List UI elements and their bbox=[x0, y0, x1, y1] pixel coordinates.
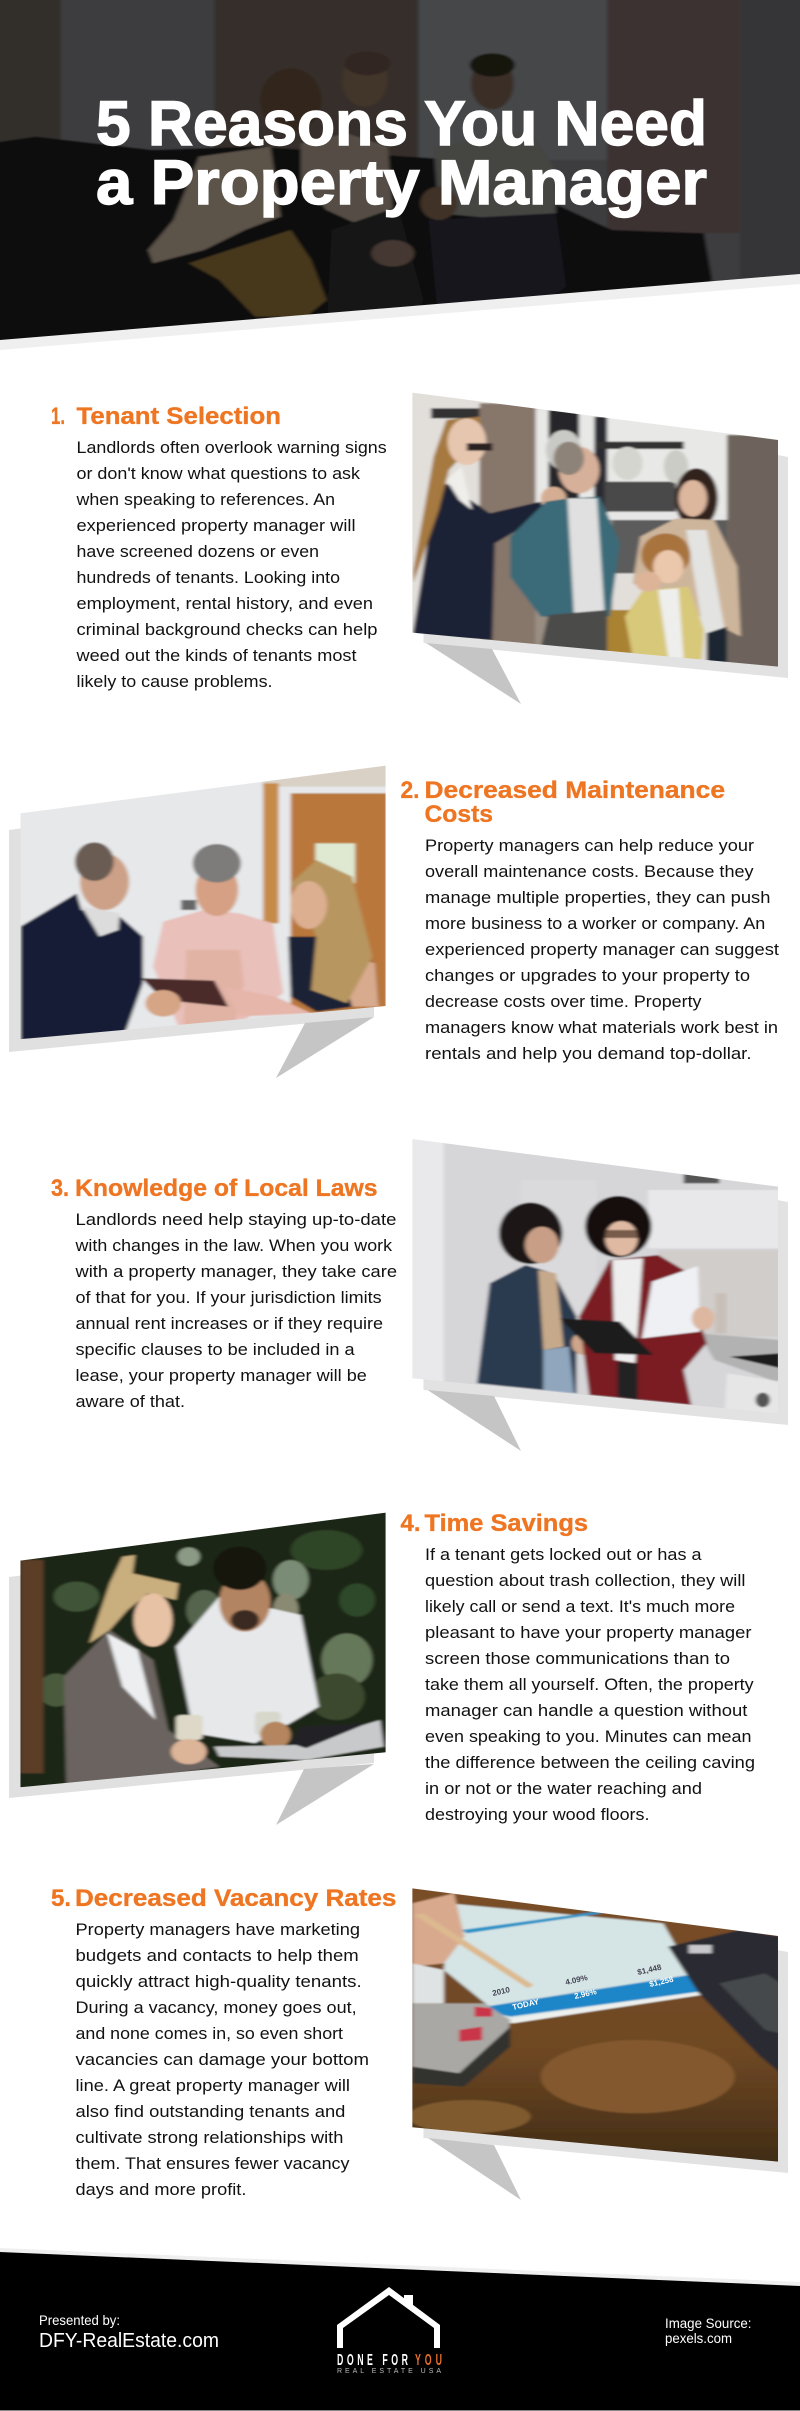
heading 2: Decreased Maintenance bbox=[424, 777, 725, 804]
text block 3: specific clauses to be included in a bbox=[76, 1341, 355, 1359]
text block 3: with changes in the law. When you work bbox=[74, 1237, 393, 1255]
text block 2: Property managers can help reduce your bbox=[425, 837, 755, 855]
text block 1: or don't know what questions to ask bbox=[76, 465, 361, 483]
text block 3: annual rent increases or if they require bbox=[76, 1315, 383, 1333]
text block 2: changes or upgrades to your property to bbox=[425, 967, 750, 985]
text block 2 bbox=[425, 837, 779, 1063]
hero banner bbox=[0, 0, 800, 360]
heading 5: Decreased Vacancy Rates bbox=[75, 1885, 396, 1912]
heading 1: Tenant Selection bbox=[76, 403, 281, 430]
text block 4: If a tenant gets locked out or has a bbox=[425, 1546, 702, 1564]
text block 1: Landlords often overlook warning signs bbox=[76, 439, 387, 457]
photo card 3 with shadow and speech tail bbox=[403, 1133, 791, 1451]
text block 4: take them all yourself. Often, the property bbox=[425, 1676, 754, 1694]
photo card 5 with shadow and speech tail bbox=[403, 1880, 791, 2200]
text block 4: in or not or the water reaching and bbox=[425, 1780, 702, 1798]
text block 1: hundreds of tenants. Looking into bbox=[76, 569, 340, 587]
text block 4: pleasant to have your property manager bbox=[425, 1624, 752, 1642]
title: a Property Manager bbox=[96, 148, 707, 218]
presented by: Presented by: bbox=[39, 2312, 120, 2328]
text block 4: question about trash collection, they will bbox=[425, 1572, 745, 1590]
text block 1: weed out the kinds of tenants most bbox=[75, 647, 357, 665]
text block 1: when speaking to references. An bbox=[75, 491, 335, 509]
text block 5: vacancies can damage your bottom bbox=[76, 2051, 369, 2069]
logo: done for you real estate usa bbox=[337, 2287, 442, 2375]
text block 5: cultivate strong relationships with bbox=[76, 2129, 343, 2147]
panel: reason 4 time savings bbox=[9, 1507, 755, 1825]
text block 5: and none comes in, so even short bbox=[76, 2025, 343, 2043]
report figures on the photo: $1,258 bbox=[648, 1975, 675, 1989]
image source: pexels.com bbox=[665, 2330, 732, 2346]
heading 2: Costs bbox=[424, 801, 493, 828]
photo: financial report, calculator and laptop on wood desk bbox=[412, 1888, 778, 2162]
photo: three colleagues around a tablet bbox=[10, 760, 393, 1047]
text block 2: decrease costs over time. Property bbox=[425, 993, 702, 1011]
report figures on the photo: $1,448 bbox=[636, 1963, 663, 1977]
text block 1: employment, rental history, and even bbox=[76, 595, 373, 613]
footer bbox=[0, 2248, 800, 2411]
text block 3: Landlords need help staying up-to-date bbox=[76, 1211, 396, 1229]
text block 1: experienced property manager will bbox=[76, 517, 356, 535]
report figures on the photo: 4.09% bbox=[564, 1973, 589, 1987]
text block 5: budgets and contacts to help them bbox=[76, 1947, 359, 1965]
text block 4: destroying your wood floors. bbox=[425, 1806, 650, 1824]
text block 4: even speaking to you. Minutes can mean bbox=[425, 1728, 752, 1746]
logo: done for you real estate usa: REAL ESTATE USA bbox=[337, 2368, 441, 2375]
hero photo: family with agent on a sofa bbox=[0, 0, 800, 360]
heading 5: 5. bbox=[51, 1885, 71, 1912]
text block 1: criminal background checks can help bbox=[76, 621, 378, 639]
text block 2: manage multiple properties, they can push bbox=[425, 889, 770, 907]
text block 4: screen those communications than to bbox=[425, 1650, 730, 1668]
text block 3: lease, your property manager will be bbox=[76, 1367, 367, 1385]
report figures on the photo bbox=[491, 1963, 675, 2012]
image source: Image Source: bbox=[665, 2315, 752, 2331]
report figures on the photo: 2.96% bbox=[573, 1987, 598, 2001]
text block 5: also find outstanding tenants and bbox=[76, 2103, 345, 2121]
logo: done for you real estate usa: DONE FOR bbox=[337, 2350, 408, 2369]
text block 3: of that for you. If your jurisdiction limits bbox=[76, 1289, 382, 1307]
text block 2: managers know what materials work best in bbox=[425, 1019, 778, 1037]
footer background bbox=[0, 2252, 800, 2411]
text block 5: them. That ensures fewer vacancy bbox=[76, 2155, 350, 2173]
text block 4: the difference between the ceiling caving bbox=[425, 1754, 755, 1772]
text block 3 bbox=[74, 1211, 397, 1411]
photo: businesswoman and man outdoors with folder bbox=[10, 1507, 393, 1793]
heading 3: Knowledge of Local Laws bbox=[75, 1175, 378, 1202]
logo: done for you real estate usa: YOU bbox=[415, 2350, 442, 2369]
heading 4: Time Savings bbox=[424, 1510, 588, 1537]
photo: two women reading documents in kitchen bbox=[412, 1139, 778, 1408]
heading 4: 4. bbox=[400, 1510, 420, 1537]
presented by: DFY-RealEstate.com bbox=[39, 2330, 219, 2352]
panel: reason 3 knowledge of local laws bbox=[51, 1133, 791, 1451]
heading 3: 3. bbox=[51, 1175, 69, 1202]
text block 2: rentals and help you demand top-dollar. bbox=[425, 1045, 752, 1063]
text block 2: more business to a worker or company. An bbox=[425, 915, 765, 933]
text block 1: have screened dozens or even bbox=[76, 543, 319, 561]
text block 2: overall maintenance costs. Because they bbox=[425, 863, 754, 881]
panel: reason 5 decreased vacancy rates bbox=[51, 1880, 791, 2200]
report figures on the photo: TODAY bbox=[511, 1997, 541, 2012]
photo card 1 with shadow and speech tail bbox=[403, 387, 791, 704]
text block 2: experienced property manager can suggest bbox=[425, 941, 779, 959]
text block 1: likely to cause problems. bbox=[76, 673, 272, 691]
text block 5: quickly attract high-quality tenants. bbox=[76, 1973, 362, 1991]
text block 5 bbox=[76, 1921, 369, 2199]
heading 1: 1. bbox=[51, 403, 65, 430]
panel: reason 1 tenant selection bbox=[51, 387, 791, 704]
footer shadow band bbox=[0, 2248, 800, 2288]
text block 4: manager can handle a question without bbox=[425, 1702, 748, 1720]
text block 4: likely call or send a text. It's much more bbox=[425, 1598, 735, 1616]
photo card 4 with shadow and speech tail bbox=[9, 1507, 393, 1825]
text block 5: During a vacancy, money goes out, bbox=[76, 1999, 357, 2017]
report figures on the photo: 2010 bbox=[491, 1985, 511, 1998]
text block 5: line. A great property manager will bbox=[76, 2077, 350, 2095]
heading 2 bbox=[400, 777, 725, 828]
text block 5: days and more profit. bbox=[76, 2181, 246, 2199]
text block 3: with a property manager, they take care bbox=[74, 1263, 397, 1281]
hero shadow band bbox=[0, 274, 800, 350]
presented by bbox=[39, 2312, 219, 2352]
photo card 2 with shadow and speech tail bbox=[9, 760, 393, 1078]
icon: house outline bbox=[337, 2287, 440, 2348]
image source bbox=[665, 2315, 752, 2346]
heading 2: 2. bbox=[400, 777, 420, 804]
text block 5: Property managers have marketing bbox=[76, 1921, 360, 1939]
title bbox=[96, 89, 707, 218]
panel: reason 2 decreased maintenance costs bbox=[9, 760, 779, 1078]
title: 5 Reasons You Need bbox=[96, 89, 707, 159]
text block 4 bbox=[425, 1546, 755, 1824]
text block 3: aware of that. bbox=[76, 1393, 185, 1411]
photo: agent and family in kitchen bbox=[403, 387, 791, 673]
text block 1 bbox=[75, 439, 387, 691]
